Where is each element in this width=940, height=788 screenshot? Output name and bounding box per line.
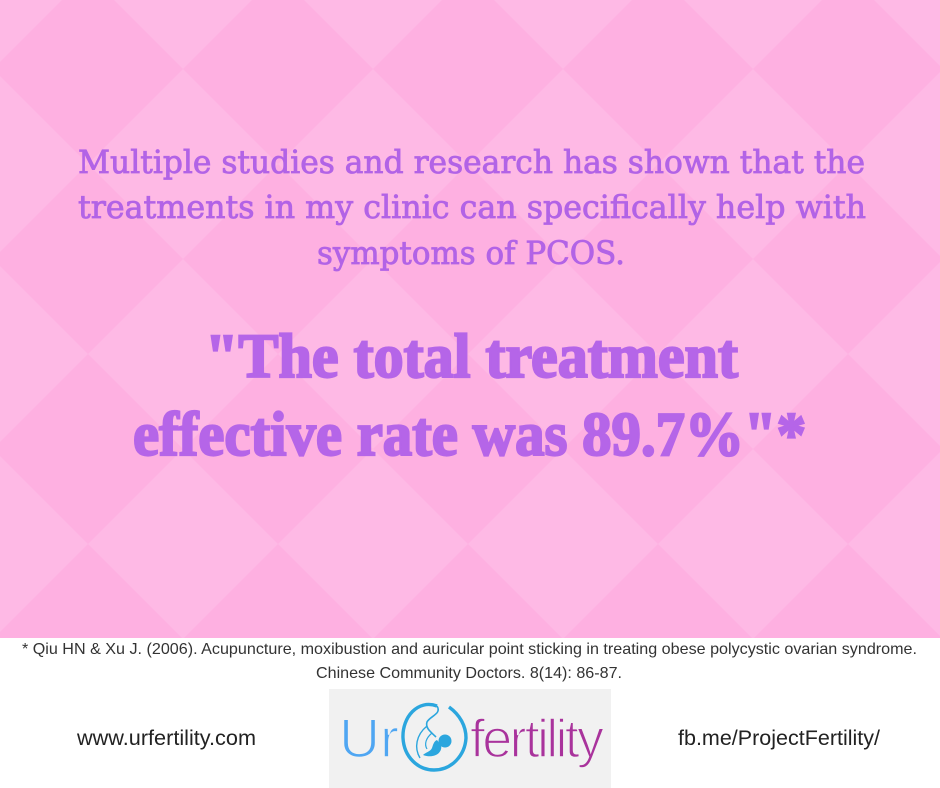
logo wordmark: Ur: Ur	[339, 707, 399, 769]
logo	[329, 689, 611, 788]
logo emblem: mother and baby	[403, 704, 466, 770]
citation text	[22, 641, 917, 682]
facebook link: fb.me/ProjectFertility/	[678, 727, 880, 750]
highlighted quote	[133, 322, 806, 469]
logo background	[329, 689, 611, 788]
intro text block	[78, 143, 866, 272]
citation text: Chinese Community Doctors. 8(14): 86-87.	[316, 665, 622, 682]
intro text block: treatments in my clinic can specifically help with	[78, 188, 866, 226]
citation text: * Qiu HN & Xu J. (2006). Acupuncture, moxibustion and auricular point sticking in treating obese polycystic ovarian syndrome.	[22, 641, 917, 658]
intro text block: symptoms of PCOS.	[317, 234, 625, 272]
footer panel	[0, 638, 940, 788]
highlighted quote: effective rate was 89.7%"*	[133, 400, 806, 469]
logo wordmark: fertility: fertility	[470, 709, 604, 769]
highlighted quote: "The total treatment	[205, 322, 738, 391]
website link: www.urfertility.com	[76, 727, 256, 750]
intro text block: Multiple studies and research has shown that the	[78, 143, 865, 181]
